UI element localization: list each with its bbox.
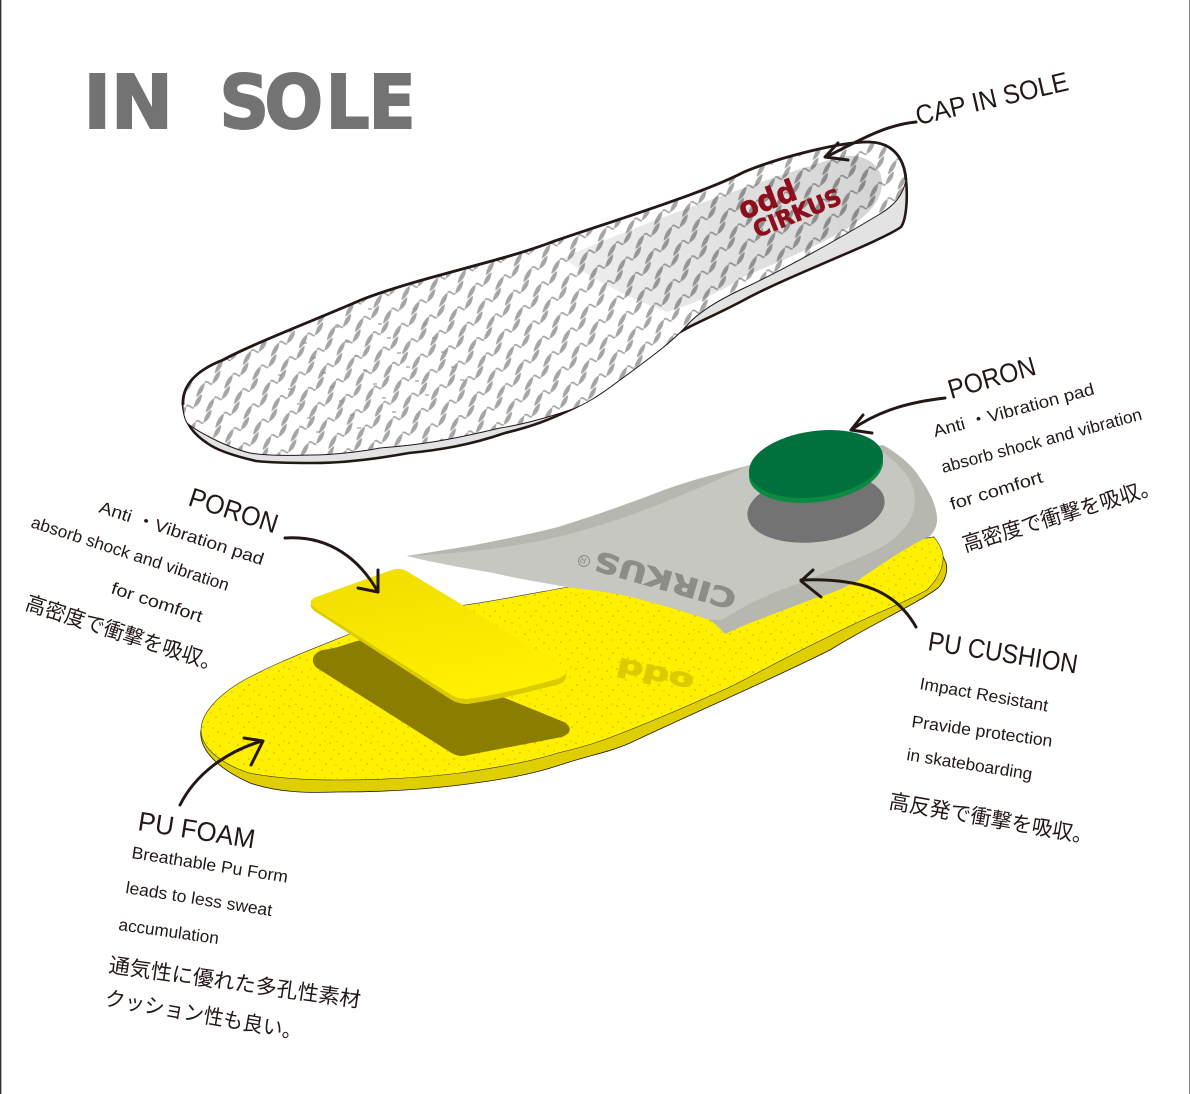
cushion body rim: [407, 445, 937, 634]
label: pu foam: leads to less sweat: [124, 878, 274, 920]
PU foam base: [201, 537, 947, 792]
label: pu foam: PU FOAM: [136, 806, 257, 854]
label: pu foam: 通気性に優れた多孔性素材: [107, 954, 362, 1012]
label: pu foam: クッション性も良い。: [103, 987, 304, 1045]
insole top face with weave pattern: [183, 142, 906, 455]
insole top outline: [183, 142, 906, 405]
label: poron right: Anti ・Vibration pad: [931, 380, 1096, 441]
arch and heel shading: [563, 156, 882, 312]
label: pu foam: Breathable Pu Form: [130, 843, 289, 887]
cap insole illustration: [183, 142, 907, 463]
title: SOLE: [220, 60, 416, 146]
title: [84, 60, 416, 146]
label: pu cushion: in skateboarding: [905, 745, 1034, 784]
label: poron right: for comfort: [948, 467, 1045, 514]
label: poron left: Anti ・Vibration pad: [97, 498, 266, 569]
label: pu foam: accumulation: [117, 915, 220, 948]
label: pu foam: [103, 806, 362, 1045]
label: pu cushion: Impact Resistant: [918, 674, 1050, 716]
page border: [0, 0, 2, 1094]
arrow: poron right: [851, 398, 945, 433]
yellow poron forefoot pad: [311, 569, 566, 704]
cushion inner face: [407, 452, 915, 620]
green poron heel pad: [745, 422, 887, 511]
label: poron left: [22, 482, 282, 677]
PU cushion: [407, 445, 937, 634]
ppo emboss: ppo: [615, 649, 697, 694]
arrow: cap insole: [825, 122, 916, 160]
title: IN: [84, 60, 173, 146]
CIRKUS upside-down logo: CIRKUS: [591, 544, 740, 614]
label: pu cushion: [887, 626, 1095, 849]
CIRKUS upside-down logo: R: [578, 554, 588, 566]
poron pad shadow: [743, 466, 889, 550]
label: cap insole: CAP IN SOLE: [913, 67, 1071, 131]
label: poron left: PORON: [185, 482, 282, 539]
arrow: poron left: [285, 538, 378, 592]
forefoot perforation dashes: [278, 309, 464, 432]
yellow poron forefoot pad shadow: [313, 640, 570, 756]
logo: odd CIRKUS: CIRKUS: [750, 185, 845, 244]
label: pu cushion: PU CUSHION: [926, 626, 1080, 680]
label: poron left: 高密度で衝撃を吸収。: [22, 592, 225, 677]
CIRKUS upside-down logo: [578, 544, 740, 614]
arrow: pu foam: [180, 738, 263, 805]
label: poron left: for comfort: [109, 579, 205, 626]
label: pu cushion: Pravide protection: [910, 712, 1054, 751]
label: poron left: absorb shock and vibration: [29, 513, 232, 595]
label: pu cushion: 高反発で衝撃を吸収。: [887, 790, 1095, 849]
logo: odd CIRKUS: odd: [733, 173, 802, 227]
foam side wall: [201, 537, 947, 792]
arrow: pu cushion: [801, 570, 916, 627]
label: poron right: [931, 351, 1163, 557]
label: poron right: 高密度で衝撃を吸収。: [960, 475, 1163, 557]
label: poron right: absorb shock and vibration: [939, 405, 1144, 477]
insole side wall: [183, 142, 907, 463]
foam top face: [201, 537, 943, 780]
label: poron right: PORON: [944, 351, 1039, 405]
